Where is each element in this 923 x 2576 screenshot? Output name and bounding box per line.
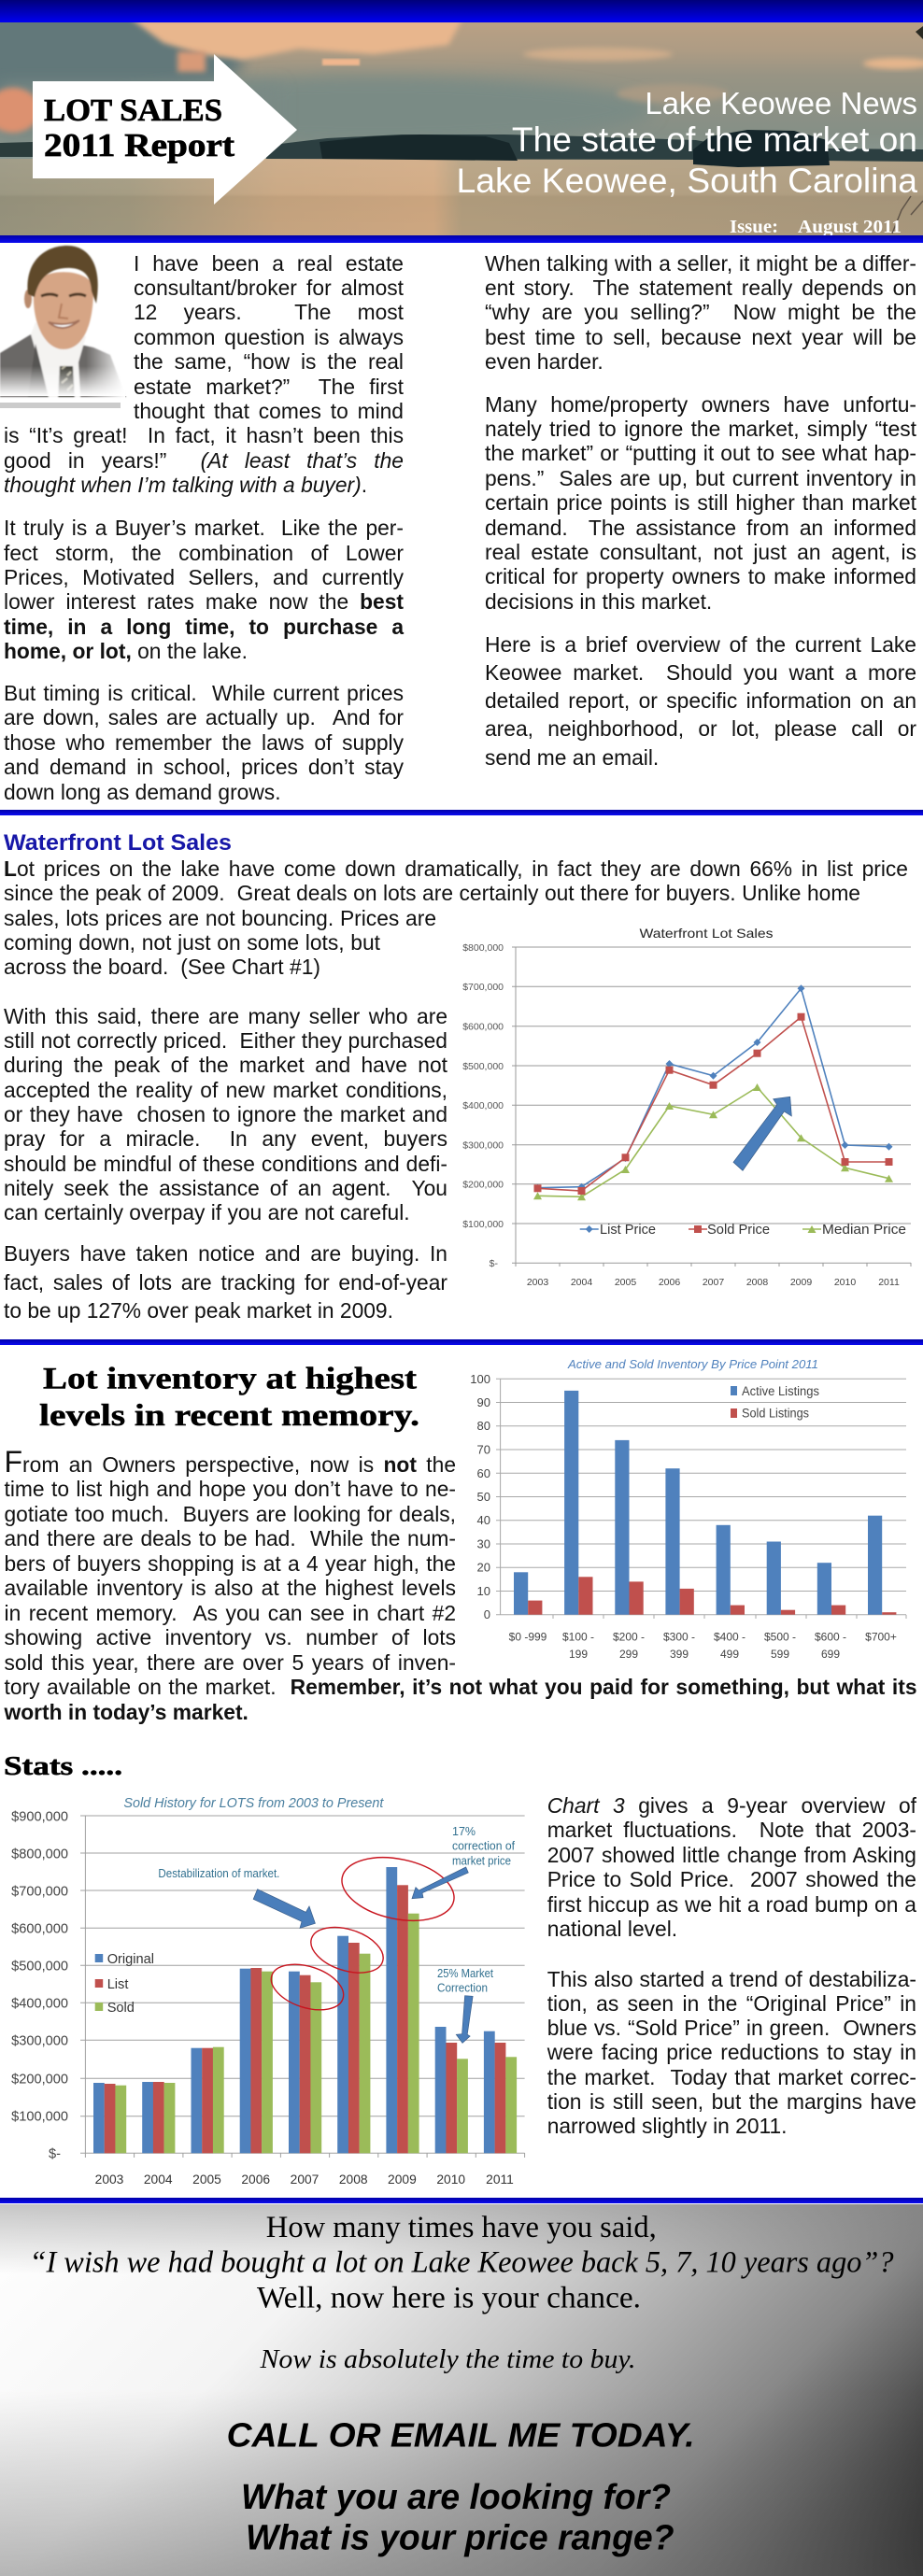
chart 3 x axis labels: 2011 [486,2173,514,2187]
chart 2: active and sold inventory bar chart [470,1357,906,1661]
intro paragraph 2: fect storm, the combination of Lower [4,541,404,565]
chart 3 x axis labels: 2005 [192,2173,221,2187]
chart 3 y axis labels: $100,000 [11,2109,68,2124]
intro paragraph 2 [4,516,404,663]
wish quote: “I wish we had bought a lot on Lake Keowee back 5, 7, 10 years ago”? [30,2246,894,2280]
chart 1 x axis labels [527,1277,900,1288]
waterfront paragraph 2: can certainly overpay if you are not careful. [4,1200,410,1224]
chart 3 title: Sold History for LOTS from 2003 to Present [123,1795,384,1811]
chart 3 x axis labels: 2009 [388,2173,417,2187]
original price bars [93,1867,495,2153]
chart 2 x axis labels: $0 -999 [509,1631,547,1644]
waterfront paragraph 3: to be up 127% over peak market in 2009. [4,1298,393,1323]
chart 1 y axis labels: $200,000 [462,1179,504,1190]
seller paragraph 1 [485,250,916,374]
chart 1 title: Waterfront Lot Sales [639,926,774,941]
chart 2 y axis labels: 100 [470,1372,490,1386]
annotation: destabilization of market: Destabilization of market. [158,1867,279,1880]
sold listings bars [528,1577,896,1615]
chart 1 y axis labels: $- [490,1258,498,1269]
seller paragraph 2: real estate consultant, not just an agent, is [485,540,916,564]
intro paragraph 3: down long as demand grows. [4,780,281,804]
question line: How many times have you said, [266,2211,657,2244]
intro paragraph 2: It truly is a Buyer’s market. Like the per- [4,516,404,540]
inventory paragraph: sold this year, there are over 5 years of inven- [4,1649,456,1674]
active listings bars [514,1391,882,1615]
waterfront intro text: sales, lots prices are not bouncing. Prices are [4,906,436,930]
section rule: intro / waterfront [0,810,923,815]
sold price series [538,1017,889,1191]
intro paragraph 1: estate market?” The first [134,375,404,399]
annotation: 17 percent correction [412,1825,516,1899]
seller paragraph 3: Keowee market. Should you want a more [485,660,916,685]
chart 3 x axis labels: 2008 [339,2173,368,2187]
chart 3 legend: Original [107,1952,154,1967]
seller paragraph 1: best time to sell, because next year will be [485,325,916,349]
annotation: 17 percent correction: 17% [452,1825,476,1838]
chart 3 legend: List [107,1977,128,1992]
heading: stats: Stats ..... [4,1751,122,1781]
inventory paragraph: showing active inventory vs. number of lots [4,1625,456,1649]
intro paragraph 1: is “It’s great! In fact, it hasn’t been this [4,423,404,447]
heading: lot inventory [39,1363,419,1433]
annotation: 25 percent market correction [437,1967,493,2043]
chart 1 y axis labels: $100,000 [462,1219,504,1230]
chart 2 x axis labels: $400 - [714,1631,746,1644]
intro paragraph 1: the same, “how is the real [134,349,404,374]
section rule: stats / call to action [0,2198,923,2203]
chart 3 y axis labels: $600,000 [11,1922,68,1937]
intro paragraph 1: good in years!” (At least that’s the [4,448,404,473]
chart 1 x axis labels: 2010 [834,1277,856,1288]
portrait of the broker [0,246,131,408]
waterfront paragraph 2: still not correctly priced. Either they purchased [4,1028,447,1053]
seller paragraph 2: nately tried to ignore the market, simply “test [485,417,916,441]
chart 2 legend [731,1384,819,1420]
chart 3 commentary paragraph 1 [547,1793,916,1941]
waterfront intro text: across the board. (See Chart #1) [4,955,320,979]
chart 2 y axis labels: 10 [477,1584,490,1598]
lot sales line: LOT SALES [44,93,222,128]
price range line: What is your price range? [246,2518,674,2557]
chart 3 y axis labels: $500,000 [11,1960,68,1974]
annotation: 25 percent market correction: 25% Market [437,1967,493,1980]
annotation: 25 percent market correction: Correction [437,1982,488,1995]
header newsletter title: Lake Keowee News [645,86,917,120]
chart 2 y axis labels: 90 [477,1395,490,1409]
chart 3 y axis labels: $800,000 [11,1847,68,1862]
chart 1 y axis labels: $700,000 [462,982,504,993]
chart 1 y axis labels [462,942,504,1269]
chart 2 x axis labels [509,1631,897,1661]
intro paragraph 3: and demand in school, prices don’t stay [4,755,404,779]
heading: lot inventory: Lot inventory at highest [43,1363,417,1396]
time to buy line: Now is absolutely the time to buy. [259,2345,635,2374]
list price series [538,988,889,1188]
heading: waterfront lot sales: Waterfront Lot Sales [4,830,232,856]
waterfront paragraph 3: Buyers have taken notice and are buying. In [4,1241,447,1266]
seller paragraph 1: When talking with a seller, it might be a differ- [485,250,916,275]
looking for line: What you are looking for? [241,2478,671,2517]
chart 1 y axis labels: $800,000 [462,942,504,954]
section rule: waterfront / inventory [0,1339,923,1345]
issue date: August 2011 [798,217,902,237]
chart 3 y axis labels: $- [49,2146,61,2161]
chart 3 commentary paragraph 2: the market. Today that market correc- [547,2065,916,2089]
chart 3 commentary paragraph 1: national level. [547,1917,677,1941]
chart 1 y axis labels: $300,000 [462,1139,504,1151]
call to action panel [0,2204,923,2576]
chart 3 commentary paragraph 1: Price to Sold Price. 2007 showed the [547,1867,916,1891]
chart 2 y axis labels: 40 [477,1513,490,1527]
inventory paragraph: worth in today’s market. [4,1700,248,1724]
seller paragraph 2: demand. The assistance from an informed [485,516,916,540]
chart 1 y axis labels: $500,000 [462,1061,504,1072]
waterfront intro text: coming down, not just on some lots, but [4,930,380,955]
inventory paragraph: available inventory is also at the highest levels [4,1576,456,1600]
intro paragraph 1: I have been a real estate [134,250,404,275]
header newsletter title [457,86,917,200]
call or email line: CALL OR EMAIL ME TODAY. [227,2415,695,2454]
chart 2 title: Active and Sold Inventory By Price Point 2011 [567,1357,818,1371]
intro paragraph 3: are down, sales are actually up. And for [4,705,404,729]
chart 3: sold history bar chart [11,1795,525,2187]
intro paragraph 2: lower interest rates make now the best [4,589,404,614]
intro paragraph 3: those who remember the laws of supply [4,730,404,755]
inventory paragraph: and there are deals to be had. While the num- [4,1526,456,1550]
chart 2 x axis labels: 399 [670,1648,689,1661]
chart 3 x axis labels: 2003 [95,2173,124,2187]
seller paragraph 3: Here is a brief overview of the current Lake [485,632,916,657]
chart 3 commentary paragraph 1: market fluctuations. Note that 2003- [547,1818,916,1842]
header newsletter title: The state of the market on [512,120,917,159]
header lake photograph [0,0,923,235]
intro paragraph 2: home, or lot, on the lake. [4,639,248,663]
header arrow with lot sales title: 2011 Report [44,127,234,163]
sold price bars [115,1914,517,2153]
seller paragraph 2: the market” or “putting it out to see what hap- [485,441,916,465]
inventory paragraph: From an Owners perspective, now is not the [4,1444,456,1478]
seller paragraph 3: send me an email. [485,745,659,770]
seller paragraph 1: even harder. [485,349,604,374]
seller paragraph 1: “why are you selling?” Now might be the [485,300,916,324]
seller paragraph 2 [485,392,916,614]
chart 2 x axis labels: $500 - [764,1631,796,1644]
chart 1 x axis labels: 2007 [703,1277,724,1288]
chart 3 y axis labels [11,1810,68,2161]
chart 1 y axis labels: $600,000 [462,1022,504,1033]
list price bars [105,1885,505,2153]
chart 3 commentary paragraph 1: first hiccup as we hit a road bump on a [547,1892,916,1917]
median price series [538,1087,889,1196]
top blue banner bar [0,0,923,22]
issue date: Issue: [730,217,778,237]
chart 1 x axis labels: 2009 [790,1277,812,1288]
seller paragraph 1: ent story. The statement really depends on [485,276,916,300]
waterfront intro text [4,856,908,979]
intro paragraph 1: consultant/broker for almost [134,276,404,300]
chart 3 commentary paragraph 2: tion, as seen in the “Original Price” in [547,1991,916,2016]
chart 1 x axis labels: 2003 [527,1277,548,1288]
chart 2 x axis labels: $100 - [562,1631,594,1644]
waterfront paragraph 2: accepted the reality of new market conditions, [4,1078,447,1102]
chart 3 legend: Sold [107,2001,135,2016]
chart 3 commentary paragraph 2: This also started a trend of destabiliza- [547,1967,916,1991]
intro paragraph 1: thought when I’m talking with a buyer). [4,473,367,497]
chart 2 y axis labels: 80 [477,1419,490,1433]
chart 2 legend: Sold Listings [742,1407,809,1420]
chart 2 y axis labels: 30 [477,1537,490,1550]
chart 3 commentary paragraph 2: blue vs. “Sold Price” in green. Owners [547,2016,916,2040]
intro paragraph 1: thought that comes to mind [134,399,404,423]
chart 1 legend: Median Price [822,1223,906,1238]
chart 2 y axis labels: 70 [477,1442,490,1457]
chart 1: waterfront lot sales line chart [462,926,911,1288]
chart 3 y axis labels: $400,000 [11,1997,68,2012]
chart 3 commentary paragraph 2: tion is still seen, but the margins have [547,2089,916,2114]
header arrow with lot sales title [33,54,297,205]
text: tory available on the market. Remember, it’s not what you paid for something, but what its [4,1675,917,1699]
chart 2 y axis labels: 20 [477,1561,490,1575]
waterfront paragraph 2: pray for a miracle. In any event, buyers [4,1126,447,1151]
intro paragraph 3 [4,681,404,804]
chart 3 y axis labels: $200,000 [11,2072,68,2087]
your chance line: Well, now here is your chance. [257,2282,641,2315]
seller paragraph 3: detailed report, or specific information on an [485,688,916,713]
waterfront intro text: since the peak of 2009. Great deals on lots are certainly out there for buyers. Unlike home [4,881,860,905]
inventory paragraph: bers of buyers shopping is at a 4 year high, the [4,1550,456,1575]
chart 2 y axis labels: 60 [477,1466,490,1480]
inventory paragraph: gotiate too much. Buyers are looking for deals, [4,1502,456,1526]
waterfront paragraph 3: fact, sales of lots are tracking for end-of-year [4,1270,447,1295]
intro paragraph 2: Prices, Motivated Sellers, and currently [4,565,404,589]
intro paragraph 1 [4,250,404,497]
chart 3 y axis labels: $900,000 [11,1810,68,1825]
red highlight circles [265,1848,460,2018]
chart 3 commentary paragraph 2: narrowed slightly in 2011. [547,2114,788,2138]
header bottom blue rule [0,235,923,243]
waterfront paragraph 2: should be mindful of these conditions and defi- [4,1152,447,1176]
chart 2 x axis labels: 299 [619,1648,638,1661]
header newsletter title: Lake Keowee, South Carolina [457,161,917,200]
seller paragraph 2: critical for property owners to make informed [485,564,916,588]
waterfront paragraph 3 [4,1241,447,1323]
chart 2 x axis labels: $200 - [613,1631,645,1644]
seller paragraph 2: certain price points is still higher than market [485,490,916,515]
chart 2 x axis labels: 199 [569,1648,588,1661]
seller paragraph 2: Many home/property owners have unfortu- [485,392,916,417]
issue date [730,217,902,237]
chart 1 legend: List Price [600,1223,656,1238]
chart 2 legend: Active Listings [742,1384,819,1398]
annotation: 17 percent correction: market price [452,1855,511,1868]
chart 1 legend [580,1223,906,1238]
waterfront paragraph 2 [4,1004,447,1224]
chart 2 y axis labels [470,1372,490,1621]
chart 2 x axis labels: 599 [771,1648,789,1661]
chart 2 x axis labels: $600 - [815,1631,846,1644]
chart 1 legend: Sold Price [707,1223,770,1238]
chart 2 y axis labels: 0 [484,1607,490,1621]
chart 1 x axis labels: 2005 [615,1277,636,1288]
intro paragraph 1: common question is always [134,325,404,349]
chart 1 x axis labels: 2006 [659,1277,680,1288]
waterfront paragraph 2: during the peak of the market and have not [4,1053,447,1077]
seller paragraph 3: area, neighborhood, or lot, please call or [485,716,916,741]
chart 3 y axis labels: $300,000 [11,2034,68,2049]
chart 2 x axis labels: $700+ [865,1631,897,1644]
intro paragraph 2: time, in a long time, to purchase a [4,615,404,639]
waterfront paragraph 2: With this said, there are many seller who are [4,1004,447,1028]
waterfront intro text: Lot prices on the lake have come down dramatically, in fact they are down 66% in list price [4,856,908,881]
chart 2 x axis labels: $300 - [663,1631,695,1644]
chart 1 blue arrow [733,1097,791,1170]
chart 3 commentary paragraph 2: were facing price reductions to stay in [547,2040,916,2064]
chart 1 y axis labels: $400,000 [462,1100,504,1111]
seller paragraph 3 [485,632,916,770]
seller paragraph 2: decisions in this market. [485,589,712,614]
chart 3 commentary paragraph 2 [547,1967,916,2138]
chart 2 y axis labels: 50 [477,1490,490,1504]
chart 1 x axis labels: 2004 [571,1277,592,1288]
annotation: destabilization of market [158,1867,315,1928]
chart 3 commentary paragraph 1: Chart 3 gives a 9-year overview of [547,1793,916,1818]
chart 2 x axis labels: 699 [821,1648,840,1661]
inventory paragraph: time to list high and hope you don’t have to ne- [4,1477,456,1501]
chart 3 commentary paragraph 1: 2007 showed little change from Asking [547,1843,916,1867]
chart 2 x axis labels: 499 [720,1648,739,1661]
chart 3 x axis labels: 2007 [291,2173,319,2187]
waterfront paragraph 2: nitely seek the assistance of an agent. You [4,1176,447,1200]
annotation: 17 percent correction: correction of [452,1840,516,1853]
chart 3 y axis labels: $700,000 [11,1885,68,1900]
chart 3 x axis labels: 2004 [144,2173,173,2187]
chart 3 x axis labels [95,2173,514,2187]
intro paragraph 3: But timing is critical. While current prices [4,681,404,705]
heading: lot inventory: levels in recent memory. [39,1399,419,1433]
inventory paragraph: in recent memory. As you can see in chart #2 [4,1601,456,1625]
chart 1 x axis labels: 2008 [746,1277,768,1288]
waterfront paragraph 2: or they have chosen to ignore the market and [4,1102,447,1126]
chart 3 legend [95,1952,154,2016]
seller paragraph 2: pens.” Sales are up, but current inventory in [485,466,916,490]
inventory paragraph [4,1444,917,1724]
intro paragraph 1: 12 years. The most [134,300,404,324]
chart 3 x axis labels: 2010 [436,2173,465,2187]
chart 1 x axis labels: 2011 [878,1277,900,1288]
chart 3 x axis labels: 2006 [241,2173,270,2187]
